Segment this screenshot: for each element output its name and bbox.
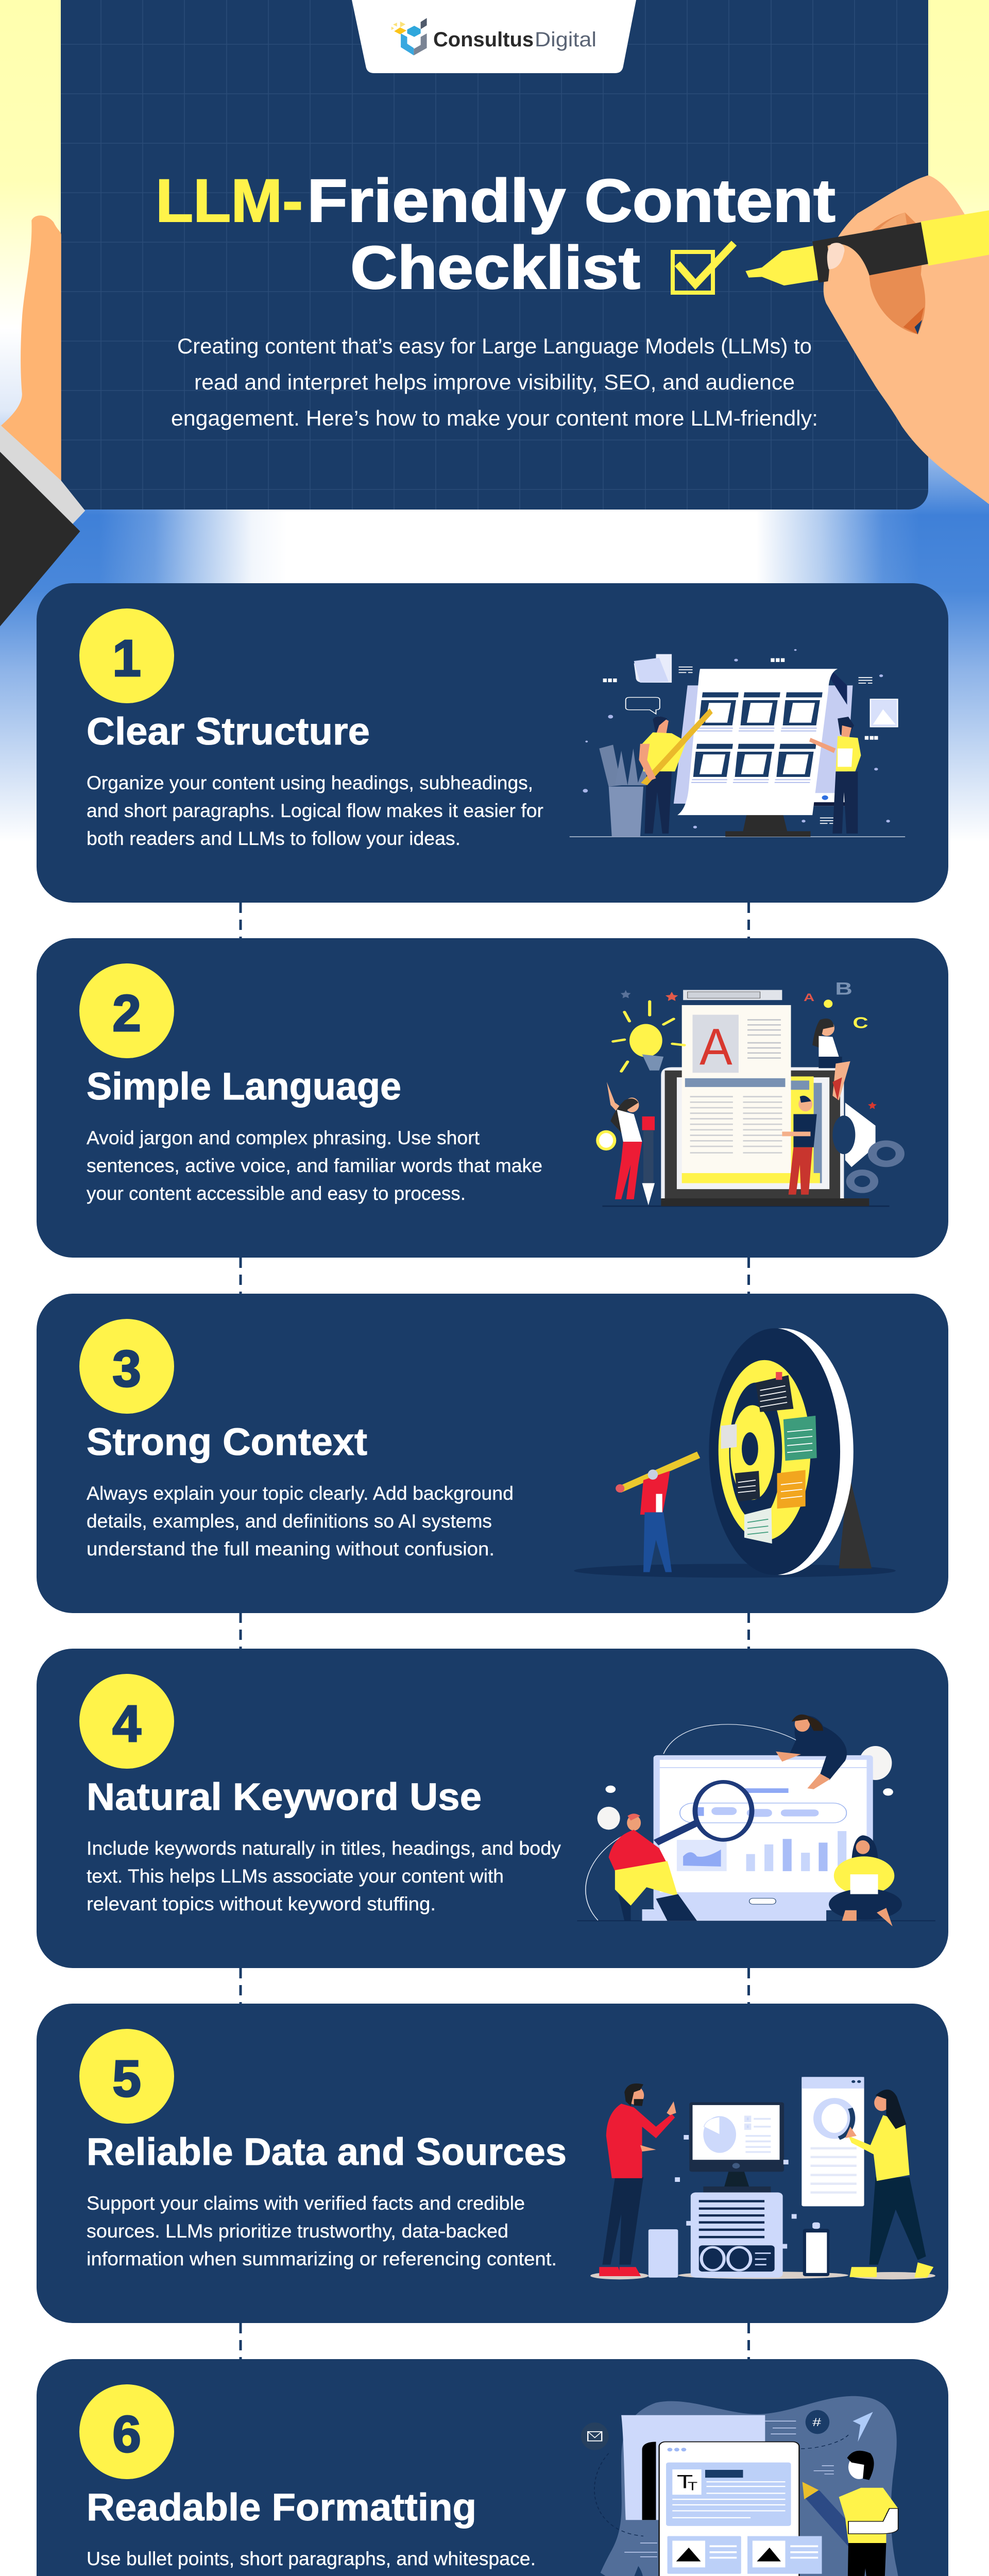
- highlighter body: [921, 210, 989, 266]
- description: [87, 1483, 514, 1560]
- title: Checklist: [350, 234, 640, 302]
- panel: step 3 strong context: [37, 1294, 948, 1613]
- number badge 4: [79, 1674, 174, 1769]
- logo wordmark: Consultus: [433, 28, 534, 51]
- illustration: people reading a page on a laptop: A: [804, 992, 814, 1004]
- intro paragraph: engagement. Here’s how to make your content more LLM-friendly:: [171, 406, 818, 430]
- number badge 5: 5: [112, 2050, 141, 2108]
- description: [87, 1838, 561, 1914]
- title: [156, 167, 835, 302]
- panel: step 2 simple language: [37, 938, 948, 1258]
- number badge 4: 4: [112, 1695, 141, 1753]
- illustration: target board with notes: [574, 1328, 896, 1578]
- illustration: people reading a page on a laptop: B: [835, 979, 852, 998]
- description: [87, 772, 543, 849]
- description: [87, 1127, 542, 1204]
- description: Use bullet points, short paragraphs, and whitespace.: [87, 2548, 536, 2569]
- description: your content accessible and easy to process.: [87, 1183, 466, 1204]
- header panel: [61, 0, 928, 510]
- logo wordmark: [433, 28, 596, 51]
- number badge 6: [79, 2384, 174, 2479]
- description: Avoid jargon and complex phrasing. Use short: [87, 1127, 480, 1148]
- panel: step 5 reliable data and sources: [37, 2004, 948, 2323]
- illustration: people reading a page on a laptop: C: [853, 1014, 868, 1031]
- description: sources. LLMs prioritize trustworthy, data-backed: [87, 2221, 508, 2242]
- description: Support your claims with verified facts and credible: [87, 2193, 525, 2214]
- title: Friendly Content: [307, 167, 835, 235]
- thumb nail: [827, 243, 844, 269]
- description: both readers and LLMs to follow your ideas.: [87, 828, 461, 849]
- number badge 5: [79, 2029, 174, 2124]
- number badge 6: 6: [112, 2405, 141, 2463]
- illustration: people reading a page on a laptop: [596, 979, 900, 1206]
- illustration: document layout with designer: [581, 2396, 900, 2576]
- heading: Clear Structure: [87, 710, 370, 753]
- panel: step 6 readable formatting: [37, 2359, 948, 2576]
- illustration: people reading a page on a laptop: A: [700, 1018, 732, 1076]
- number badge 3: 3: [112, 1340, 141, 1398]
- icon: checkbox: [673, 243, 734, 293]
- logo wordmark: Digital: [535, 28, 596, 51]
- number badge 1: [79, 608, 174, 703]
- number badge 3: [79, 1319, 174, 1414]
- panel: step 1 clear structure: [37, 583, 948, 903]
- intro paragraph: Creating content that’s easy for Large Language Models (LLMs) to: [177, 334, 812, 358]
- heading: Readable Formatting: [87, 2486, 476, 2529]
- heading: Strong Context: [87, 1420, 367, 1463]
- description: Organize your content using headings, subheadings,: [87, 772, 533, 793]
- shirt cuff: [0, 425, 85, 524]
- logo tab: [352, 0, 636, 73]
- highlighter collar: [812, 222, 928, 283]
- description: text. This helps LLMs associate your content with: [87, 1866, 504, 1887]
- illustration: document layout with designer: #: [812, 2416, 821, 2429]
- description: details, examples, and definitions so AI systems: [87, 1511, 492, 1532]
- panel: step 4 natural keyword use: [37, 1649, 948, 1968]
- number badge 2: 2: [112, 985, 141, 1042]
- heading: Reliable Data and Sources: [87, 2130, 567, 2173]
- description: [87, 2193, 557, 2269]
- heading: Simple Language: [87, 1065, 401, 1108]
- illustration: analysts with server and dashboards: [590, 2077, 935, 2279]
- description: understand the full meaning without confusion.: [87, 1538, 494, 1560]
- thumb: [826, 244, 871, 289]
- illustration: document layout with designer: T: [688, 2479, 697, 2493]
- right hand holding highlighter: [745, 175, 989, 504]
- logo mark: [391, 18, 427, 56]
- intro paragraph: read and interpret helps improve visibility, SEO, and audience: [194, 370, 795, 394]
- number badge 2: [79, 963, 174, 1058]
- heading: Natural Keyword Use: [87, 1775, 482, 1818]
- suit sleeve: [0, 452, 80, 626]
- intro paragraph: [171, 334, 818, 430]
- description: sentences, active voice, and familiar words that make: [87, 1155, 542, 1176]
- title: LLM-: [156, 167, 303, 235]
- description: relevant topics without keyword stuffing.: [87, 1893, 436, 1914]
- illustration: team arranging document on monitor: [570, 649, 905, 837]
- description: information when summarizing or referencing content.: [87, 2248, 557, 2269]
- description: Always explain your topic clearly. Add background: [87, 1483, 514, 1504]
- dashed connectors: [241, 903, 749, 2576]
- illustration: magnifier over search results: [577, 1715, 935, 1926]
- left hand holding page: [0, 215, 85, 626]
- highlighter tip: [745, 246, 818, 285]
- description: Include keywords naturally in titles, headings, and body: [87, 1838, 561, 1859]
- illustration: document layout with designer: T: [677, 2471, 693, 2493]
- description: and short paragraphs. Logical flow makes it easier for: [87, 800, 543, 821]
- number badge 1: 1: [112, 630, 141, 687]
